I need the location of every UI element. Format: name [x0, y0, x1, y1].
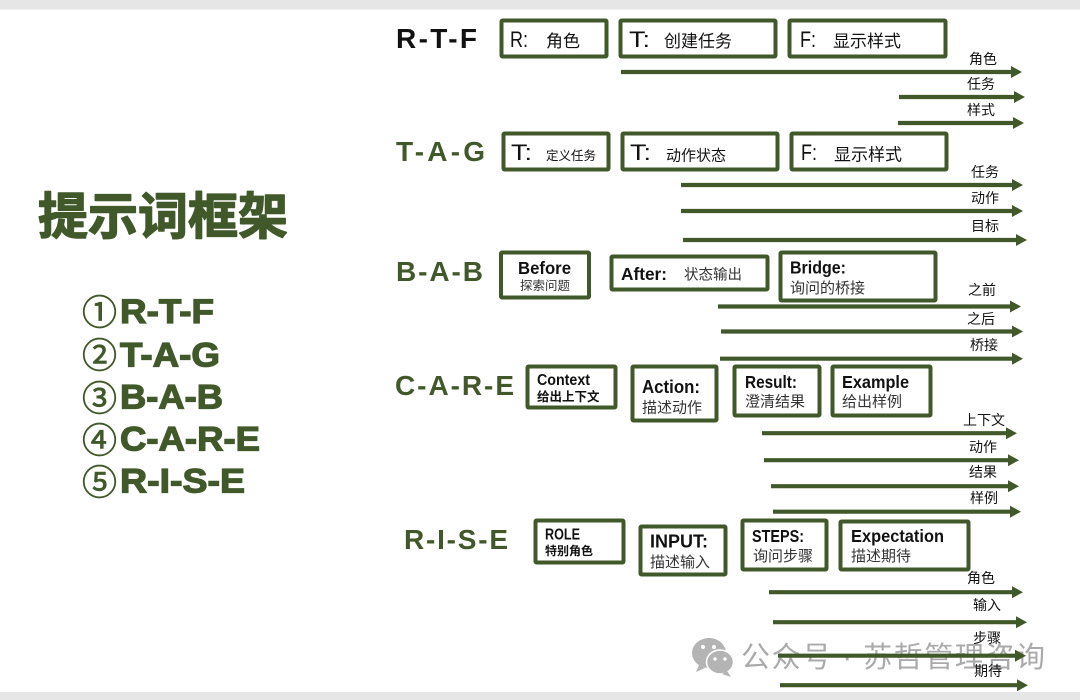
- box Context: [528, 366, 616, 408]
- top band: [0, 0, 1080, 10]
- box Result: Result:: [745, 372, 797, 392]
- box F: F:: [801, 140, 817, 165]
- box T: 创建任务: [664, 32, 732, 51]
- list item 3: B-A-B: [120, 378, 223, 416]
- box Context: 给出上下文: [537, 389, 600, 404]
- box Context: Context: [537, 372, 590, 389]
- list item 1: [82, 293, 214, 333]
- box ROLE: [536, 520, 624, 562]
- arrow 角色: [621, 51, 1022, 78]
- section: B-A-B: [396, 252, 1023, 365]
- arrow 期待: 期待: [974, 663, 1002, 679]
- box T action: 动作状态: [666, 148, 726, 164]
- arrow 上下文: 上下文: [963, 412, 1005, 428]
- box T action: T:: [630, 140, 651, 165]
- box Example: 给出样例: [842, 394, 902, 410]
- arrow 桥接: 桥接: [970, 337, 998, 353]
- box R: [502, 20, 606, 56]
- box Example: Example: [842, 372, 909, 392]
- heading R-I-S-E: R-I-S-E: [404, 524, 508, 555]
- arrow 样式: [898, 102, 1024, 129]
- box F: 显示样式: [833, 32, 901, 51]
- arrow 步骤: [778, 630, 1026, 662]
- box T define: [504, 134, 608, 170]
- box After: After:: [621, 264, 667, 284]
- list item 4: C-A-R-E: [120, 420, 260, 458]
- arrow 样例: [773, 490, 1021, 518]
- arrow 角色: [769, 570, 1023, 598]
- box Bridge: 询问的桥接: [790, 280, 865, 297]
- box STEPS: STEPS:: [752, 526, 804, 546]
- box INPUT: [640, 526, 726, 574]
- heading B-A-B: B-A-B: [396, 256, 483, 287]
- box After: 状态输出: [684, 266, 742, 284]
- heading T-A-G: T-A-G: [396, 136, 485, 167]
- arrow 样式: 样式: [967, 102, 995, 118]
- section: C-A-R-E: [395, 366, 1021, 518]
- box Result: [734, 366, 820, 416]
- arrow 之前: 之前: [968, 282, 996, 298]
- arrow 任务: 任务: [971, 164, 999, 180]
- list item 2: ②: [82, 337, 117, 376]
- box T: T:: [629, 27, 650, 52]
- list item 1: R-T-F: [120, 293, 214, 331]
- bottom band: [0, 692, 1080, 700]
- arrow 任务: [899, 76, 1025, 103]
- section: T-A-G: [396, 134, 1027, 246]
- arrow 任务: [681, 164, 1023, 191]
- box Before: [501, 252, 589, 298]
- box After: [612, 256, 768, 290]
- box T define: 定义任务: [546, 148, 596, 163]
- list item 4: [82, 420, 260, 461]
- box STEPS: [742, 520, 826, 570]
- arrow 样例: 样例: [970, 490, 998, 506]
- box Expectation: 描述期待: [851, 548, 911, 565]
- heading R-T-F: R-T-F: [396, 23, 477, 54]
- arrow 任务: 任务: [967, 76, 995, 92]
- arrow 输入: 输入: [973, 597, 1001, 613]
- box T define: T:: [511, 140, 532, 165]
- arrow 输入: [773, 597, 1027, 628]
- box Action: [632, 366, 716, 420]
- box Action: Action:: [642, 376, 700, 397]
- section: R-I-S-E: [404, 520, 1028, 691]
- arrow 之前: [718, 282, 1021, 312]
- box Bridge: [780, 252, 936, 300]
- list item 2: [82, 336, 220, 376]
- box Result: 澄清结果: [745, 394, 805, 410]
- list item 4: ④: [82, 422, 117, 461]
- arrow 角色: 角色: [969, 51, 997, 67]
- arrow 结果: 结果: [969, 464, 997, 480]
- box R: R:: [510, 27, 528, 52]
- box F: [790, 20, 946, 56]
- box ROLE: ROLE: [545, 526, 580, 544]
- heading C-A-R-E: C-A-R-E: [395, 370, 514, 401]
- list item 2: T-A-G: [120, 336, 220, 374]
- box R: 角色: [546, 32, 580, 51]
- box INPUT: 描述输入: [650, 554, 710, 571]
- box T action: [622, 134, 778, 170]
- list item 3: ③: [82, 380, 117, 419]
- arrow 步骤: 步骤: [973, 630, 1001, 646]
- arrow 目标: [683, 218, 1027, 246]
- arrow 之后: 之后: [967, 311, 995, 327]
- watermark text: 公众号 · 苏哲管理咨询: [741, 641, 1045, 674]
- box Before: 探索问题: [520, 279, 571, 293]
- arrow 期待: [780, 663, 1028, 691]
- box F: [792, 134, 946, 170]
- icon: wechat: [692, 638, 734, 677]
- arrow 角色: 角色: [967, 570, 995, 586]
- arrow 结果: [771, 464, 1019, 492]
- box Before: Before: [518, 258, 571, 278]
- box Action: 描述动作: [642, 400, 702, 416]
- list item 5: ⑤: [82, 464, 117, 503]
- box F: 显示样式: [834, 146, 902, 164]
- box F: F:: [800, 27, 816, 52]
- arrow 上下文: [762, 412, 1017, 439]
- arrow 目标: 目标: [971, 218, 999, 234]
- box ROLE: 特别角色: [545, 543, 593, 558]
- arrow 桥接: [720, 337, 1023, 365]
- box INPUT: INPUT:: [650, 530, 708, 552]
- list item 1: ①: [82, 294, 117, 333]
- list item 3: [82, 378, 223, 419]
- arrow 动作: 动作: [971, 190, 999, 206]
- list item 5: R-I-S-E: [120, 462, 245, 500]
- box Expectation: [840, 522, 968, 570]
- box Expectation: Expectation: [851, 526, 944, 546]
- framework list: [82, 293, 260, 503]
- watermark: [692, 638, 1045, 677]
- arrow 动作: [764, 439, 1019, 466]
- section: R-T-F: [396, 20, 1025, 129]
- list item 5: [82, 462, 245, 503]
- title: 提示词框架: [38, 189, 288, 245]
- box T: [620, 20, 776, 56]
- arrow 之后: [721, 311, 1023, 338]
- arrow 动作: 动作: [969, 439, 997, 455]
- box STEPS: 询问步骤: [753, 548, 813, 565]
- arrow 动作: [681, 190, 1023, 217]
- box Bridge: Bridge:: [790, 258, 846, 278]
- box Example: [832, 366, 930, 416]
